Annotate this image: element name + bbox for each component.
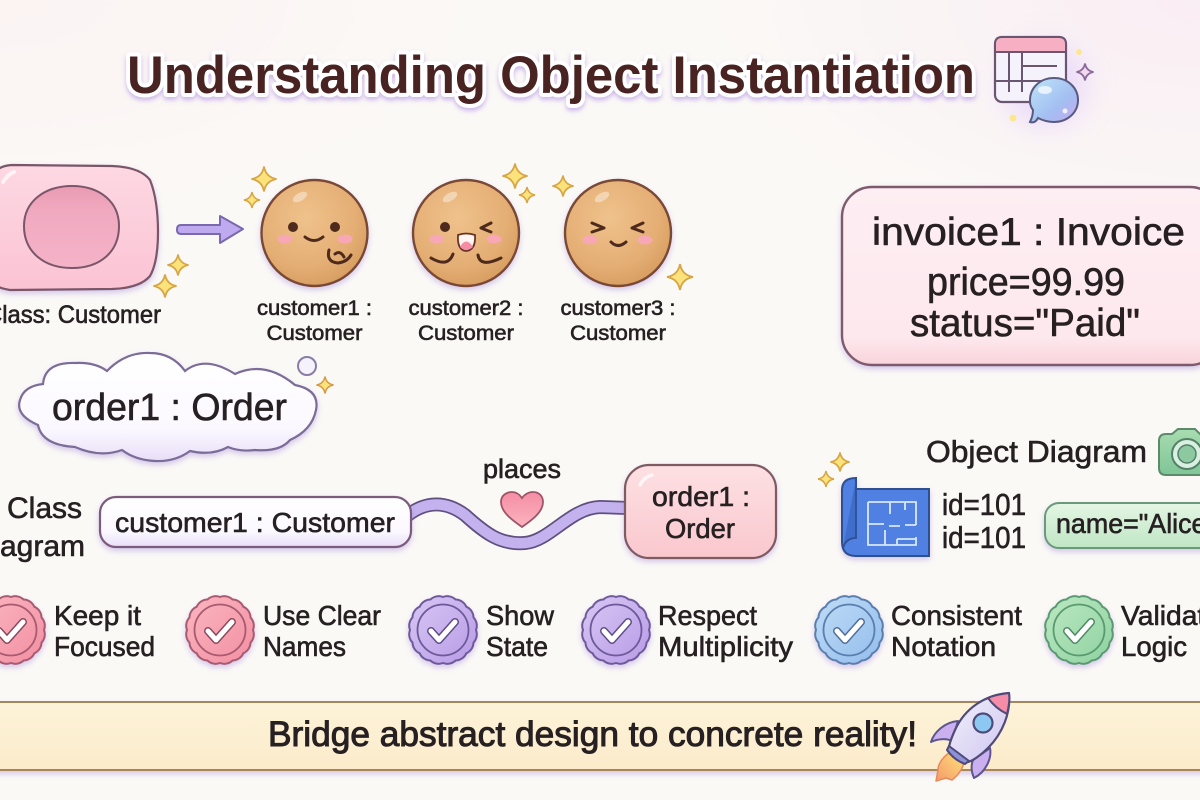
- label: places: places: [483, 454, 561, 484]
- text: id attributes: id=101: [942, 487, 1026, 522]
- title: Understanding Object Instantiation: [127, 46, 975, 105]
- icon: heart: [501, 492, 543, 527]
- text: consistent notation: Consistent: [891, 600, 1022, 631]
- label: customer3: customer3 :: [560, 296, 676, 320]
- panel: invoice object card: [842, 187, 1200, 365]
- label: customer2: [408, 296, 524, 345]
- label: customer3: Customer: [570, 321, 666, 345]
- label: customer1: customer1 :: [257, 296, 372, 320]
- badge: validate logic: [1045, 596, 1200, 664]
- panel: order1 box: [625, 465, 776, 558]
- label: customer2: Customer: [418, 321, 514, 345]
- badge: keep it focused: [0, 596, 155, 664]
- badge: use clear names: [186, 596, 381, 664]
- label: customer3: [560, 296, 676, 345]
- text: consistent notation: Notation: [891, 631, 996, 662]
- panel: customer2 object: [408, 164, 535, 345]
- icon: blue check badge: [815, 596, 883, 664]
- panel: order cloud: [19, 353, 333, 461]
- icon: purple check badge: [409, 596, 477, 664]
- icon: purple check badge 2: [582, 596, 650, 664]
- text: status: status="Paid": [910, 302, 1140, 345]
- icon: pink check badge: [0, 596, 45, 664]
- icon: camera: [1159, 429, 1200, 475]
- icon: sparkles near class: [154, 254, 188, 298]
- pill: customer1 object: [100, 497, 411, 547]
- icon: pink check badge 2: [186, 596, 254, 664]
- arrow: class to instances: [177, 216, 243, 243]
- text: order1: order1 : Order: [52, 387, 287, 429]
- panel: customer3 object: [552, 176, 693, 345]
- icon: green check badge: [1045, 596, 1113, 664]
- label: customer1: Customer: [266, 321, 362, 345]
- text: banner message: Bridge abstract design to concrete reality!: [268, 715, 917, 754]
- text: use clear names: Names: [263, 631, 346, 662]
- text: use clear names: Use Clear: [263, 600, 381, 631]
- text: use clear names: [263, 600, 381, 662]
- text: show state: Show: [486, 600, 555, 631]
- badge: respect multiplicity: [582, 596, 793, 664]
- panel: customer1 object: [244, 166, 372, 345]
- text: price: price=99.99: [927, 261, 1125, 304]
- text: validate logic: Logic: [1121, 631, 1187, 662]
- heading: object diagram: Object Diagram: [926, 434, 1147, 469]
- connector: places link: [408, 504, 628, 543]
- text: order1 label: Order: [665, 513, 735, 544]
- icon: customer2 face: [413, 180, 519, 286]
- badge: show state: [409, 596, 555, 664]
- text: customer1 pill label: customer1 : Customer: [115, 507, 395, 538]
- banner: takeaway: [0, 702, 1200, 770]
- icon: rocket: [931, 693, 1009, 781]
- text: order1 label: [652, 481, 750, 544]
- badge: consistent notation: [815, 596, 1022, 664]
- icon: blueprint: [818, 452, 929, 556]
- panel: class blueprint block: [0, 165, 161, 329]
- text: keep it focused: [54, 600, 155, 662]
- icon: customer1 face: [262, 180, 368, 286]
- text: keep it focused: Keep it: [54, 600, 141, 631]
- pill: name attribute: [1045, 503, 1200, 548]
- heading: class diagram: Class: [7, 492, 82, 525]
- heading: class diagram: [0, 492, 85, 563]
- text: respect multiplicity: Multiplicity: [658, 631, 793, 662]
- icon: customer3 face: [565, 180, 671, 286]
- text: consistent notation: [891, 600, 1022, 662]
- text: validate logic: [1121, 600, 1200, 662]
- label: customer2: customer2 :: [408, 296, 524, 320]
- icon: table with speech bubble: [995, 37, 1094, 127]
- text: order1 label: order1 :: [652, 481, 750, 512]
- text: show state: State: [486, 631, 548, 662]
- text: respect multiplicity: [658, 600, 793, 662]
- text: id attributes: [942, 487, 1026, 555]
- text: respect multiplicity: Respect: [658, 600, 757, 631]
- text: keep it focused: Focused: [54, 631, 155, 662]
- text: show state: [486, 600, 555, 662]
- label: customer1: [257, 296, 372, 345]
- text: invoice title: invoice1 : Invoice: [872, 211, 1185, 254]
- text: id attributes: id=101: [942, 520, 1026, 555]
